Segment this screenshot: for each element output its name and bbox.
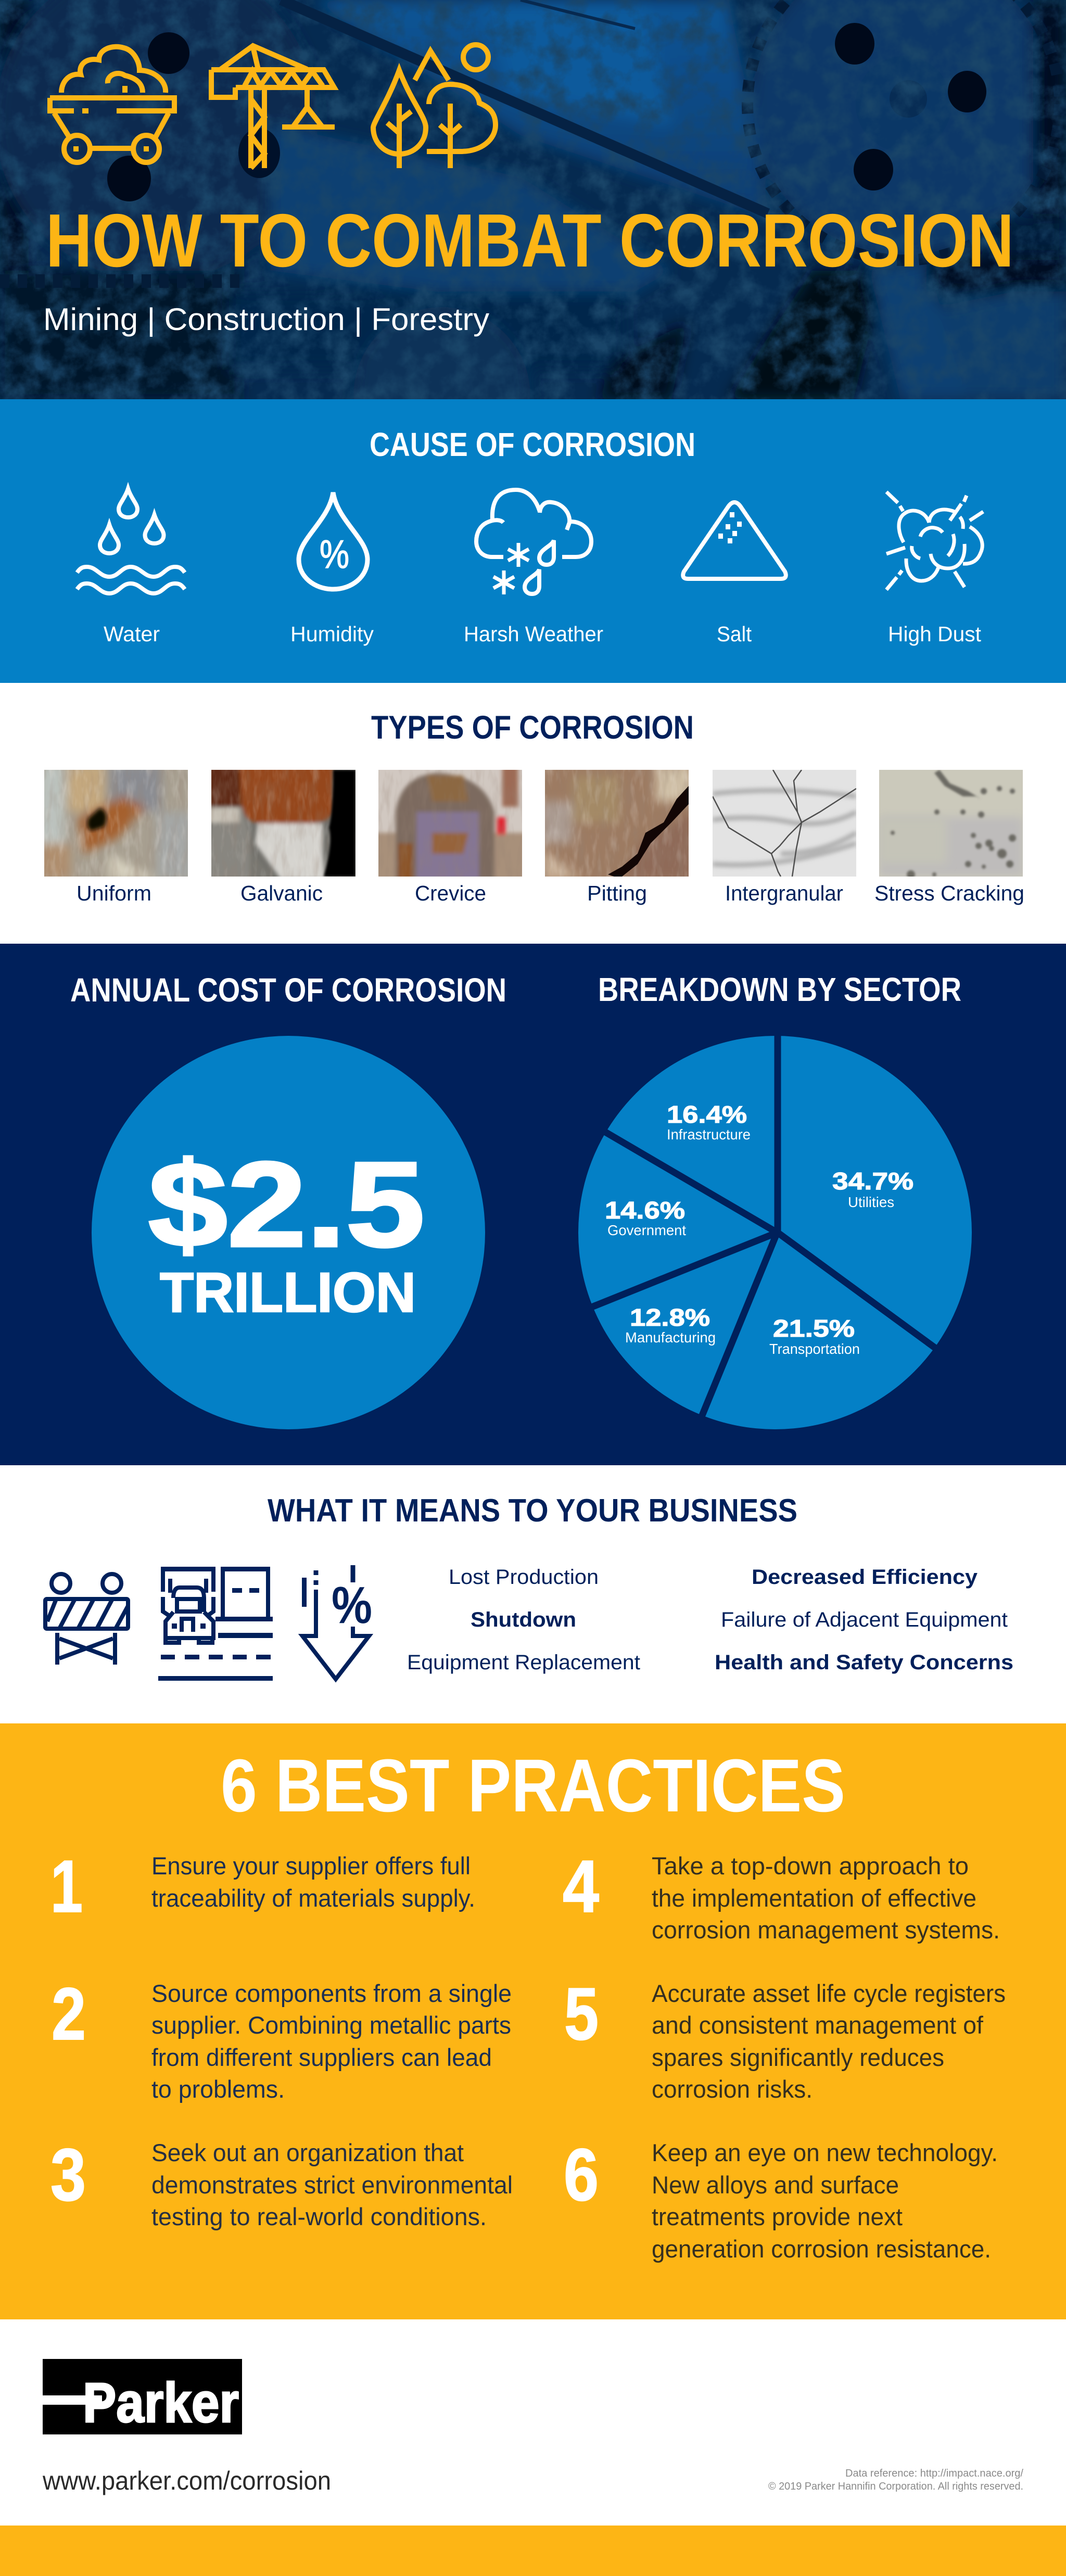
slice label: manufacturing: 12.8% bbox=[630, 1304, 710, 1331]
practice 3: testing to real-world conditions. bbox=[151, 2203, 487, 2230]
practice 6: Keep an eye on new technology. bbox=[652, 2139, 998, 2166]
header background: machinery photo bbox=[0, 0, 1066, 399]
panel: what it means to your business bbox=[0, 1465, 1066, 1723]
icon: harsh weather bbox=[476, 490, 591, 594]
bottom band bbox=[0, 2526, 1066, 2576]
slice label: infrastructure: Infrastructure bbox=[667, 1126, 751, 1143]
practice 1: traceability of materials supply. bbox=[151, 1884, 475, 1912]
panel: cost and sector breakdown bbox=[0, 944, 1066, 1465]
icon: water bbox=[77, 489, 185, 593]
icon: high dust bbox=[886, 492, 983, 590]
subtitle: Mining | Construction | Forestry bbox=[43, 302, 489, 337]
slice label: infrastructure bbox=[667, 1101, 751, 1143]
data reference: Data reference: http://impact.nace.org/ bbox=[845, 2468, 1023, 2479]
icon: truck at loading dock bbox=[158, 1567, 273, 1681]
practice 5: corrosion risks. bbox=[652, 2075, 813, 2103]
list: business impacts: Failure of Adjacent Equipment bbox=[721, 1608, 1008, 1631]
practice 6: New alloys and surface bbox=[652, 2171, 899, 2199]
panel: footer bbox=[0, 2319, 1066, 2526]
panel: types of corrosion bbox=[44, 715, 1023, 905]
practice 4: corrosion management systems. bbox=[652, 1916, 1000, 1944]
panel: header bbox=[0, 0, 1066, 399]
heading: best practices: 6 BEST PRACTICES bbox=[221, 1744, 845, 1828]
icon: trees bbox=[373, 45, 496, 168]
icon: tower crane bbox=[211, 46, 335, 168]
slice label: government: 14.6% bbox=[605, 1197, 685, 1224]
practice 3: 3 bbox=[50, 2134, 86, 2216]
label: galvanic: Galvanic bbox=[240, 881, 323, 905]
value unit: TRILLION bbox=[160, 1261, 416, 1324]
practice 2: 2 bbox=[52, 1973, 86, 2055]
icon: road barrier bbox=[45, 1574, 128, 1665]
practice 6: generation corrosion resistance. bbox=[652, 2235, 991, 2263]
slice label: government bbox=[605, 1197, 686, 1238]
practice 1: 1 bbox=[50, 1845, 83, 1928]
photo: stress cracking bbox=[879, 770, 1023, 879]
label: intergranular: Intergranular bbox=[725, 881, 843, 905]
list: business impacts: Equipment Replacement bbox=[407, 1651, 640, 1674]
Parker logo bbox=[43, 2359, 242, 2434]
practice 3: demonstrates strict environmental bbox=[151, 2171, 513, 2199]
practice 4 bbox=[563, 1845, 1000, 1944]
label: crevice: Crevice bbox=[415, 881, 486, 905]
icon: down arrow with percent: % bbox=[332, 1576, 372, 1634]
practice 4: Take a top-down approach to bbox=[652, 1852, 969, 1880]
slice label: manufacturing bbox=[625, 1304, 716, 1346]
heading: breakdown: BREAKDOWN BY SECTOR bbox=[598, 971, 961, 1008]
label: water: Water bbox=[104, 622, 160, 646]
practice 5 bbox=[564, 1973, 1006, 2103]
list: business impacts: Health and Safety Concerns bbox=[715, 1651, 1013, 1674]
list: business impacts: Decreased Efficiency bbox=[752, 1566, 978, 1589]
label: high dust: High Dust bbox=[888, 622, 982, 646]
icon: humidity bbox=[299, 492, 367, 589]
photo: pitting corrosion bbox=[545, 770, 689, 877]
practice 5: spares significantly reduces bbox=[652, 2044, 944, 2071]
list: business impacts: Lost Production bbox=[449, 1566, 599, 1589]
slice label: infrastructure: 16.4% bbox=[667, 1101, 747, 1128]
practice 5: and consistent management of bbox=[652, 2011, 984, 2039]
practice 1: Ensure your supplier offers full bbox=[151, 1852, 471, 1880]
website url: www.parker.com/corrosion bbox=[42, 2466, 331, 2495]
label: harsh weather: Harsh Weather bbox=[464, 622, 603, 646]
label: humidity: Humidity bbox=[290, 622, 374, 646]
label: stress cracking: Stress Cracking bbox=[874, 881, 1024, 905]
photo: galvanic corrosion bbox=[208, 765, 356, 880]
photo: intergranular corrosion bbox=[713, 770, 856, 877]
heading: business: WHAT IT MEANS TO YOUR BUSINESS bbox=[268, 1493, 797, 1529]
slice label: utilities: 34.7% bbox=[832, 1168, 913, 1195]
heading: cause of corrosion: CAUSE OF CORROSION bbox=[370, 426, 695, 463]
heading: types of corrosion: TYPES OF CORROSION bbox=[371, 709, 694, 746]
panel: cause of corrosion bbox=[0, 399, 1066, 683]
slice label: transportation: 21.5% bbox=[773, 1315, 855, 1342]
practice 6 bbox=[564, 2134, 998, 2263]
copyright: © 2019 Parker Hannifin Corporation. All rights reserved. bbox=[768, 2481, 1023, 2492]
icon: down arrow with percent bbox=[302, 1565, 372, 1679]
value: 2.5: $2.5 bbox=[148, 1137, 425, 1272]
icon: humidity: % bbox=[320, 532, 349, 577]
practice 4: 4 bbox=[563, 1845, 599, 1928]
cost circle bbox=[92, 1036, 485, 1429]
practice 5: 5 bbox=[564, 1973, 599, 2055]
practice 2: to problems. bbox=[151, 2075, 285, 2103]
label: salt: Salt bbox=[717, 622, 752, 646]
list: business impacts bbox=[407, 1566, 1013, 1674]
practice 6: treatments provide next bbox=[652, 2203, 903, 2230]
label: uniform: Uniform bbox=[77, 881, 151, 905]
practice 4: the implementation of effective bbox=[652, 1884, 976, 1912]
practice 3 bbox=[50, 2134, 513, 2230]
practice 1 bbox=[50, 1845, 475, 1928]
heading: annual cost: ANNUAL COST OF CORROSION bbox=[70, 971, 506, 1009]
slice label: transportation: Transportation bbox=[769, 1341, 860, 1357]
practice 3: Seek out an organization that bbox=[151, 2139, 464, 2166]
practice 2: Source components from a single bbox=[151, 1979, 512, 2007]
icon: mine cart bbox=[50, 47, 174, 162]
practice 6: 6 bbox=[564, 2134, 599, 2216]
slice label: utilities: Utilities bbox=[848, 1194, 894, 1210]
slice label: transportation bbox=[769, 1315, 860, 1357]
list: business impacts: Shutdown bbox=[471, 1608, 576, 1631]
slice label: manufacturing: Manufacturing bbox=[625, 1329, 716, 1346]
practice 5: Accurate asset life cycle registers bbox=[652, 1979, 1006, 2007]
practice 2: from different suppliers can lead bbox=[151, 2044, 492, 2071]
practice 2: supplier. Combining metallic parts bbox=[151, 2011, 511, 2039]
label: pitting: Pitting bbox=[587, 881, 647, 905]
pie chart: sector breakdown bbox=[578, 1033, 972, 1429]
photo: crevice corrosion bbox=[378, 770, 522, 877]
panel: 6 best practices bbox=[0, 1723, 1066, 2319]
photo: uniform corrosion bbox=[44, 770, 188, 877]
slice label: utilities bbox=[832, 1168, 913, 1210]
icon: salt bbox=[683, 502, 786, 579]
practice 2 bbox=[52, 1973, 512, 2103]
slice label: government: Government bbox=[607, 1222, 686, 1238]
Parker logo: Parker bbox=[83, 2371, 239, 2434]
